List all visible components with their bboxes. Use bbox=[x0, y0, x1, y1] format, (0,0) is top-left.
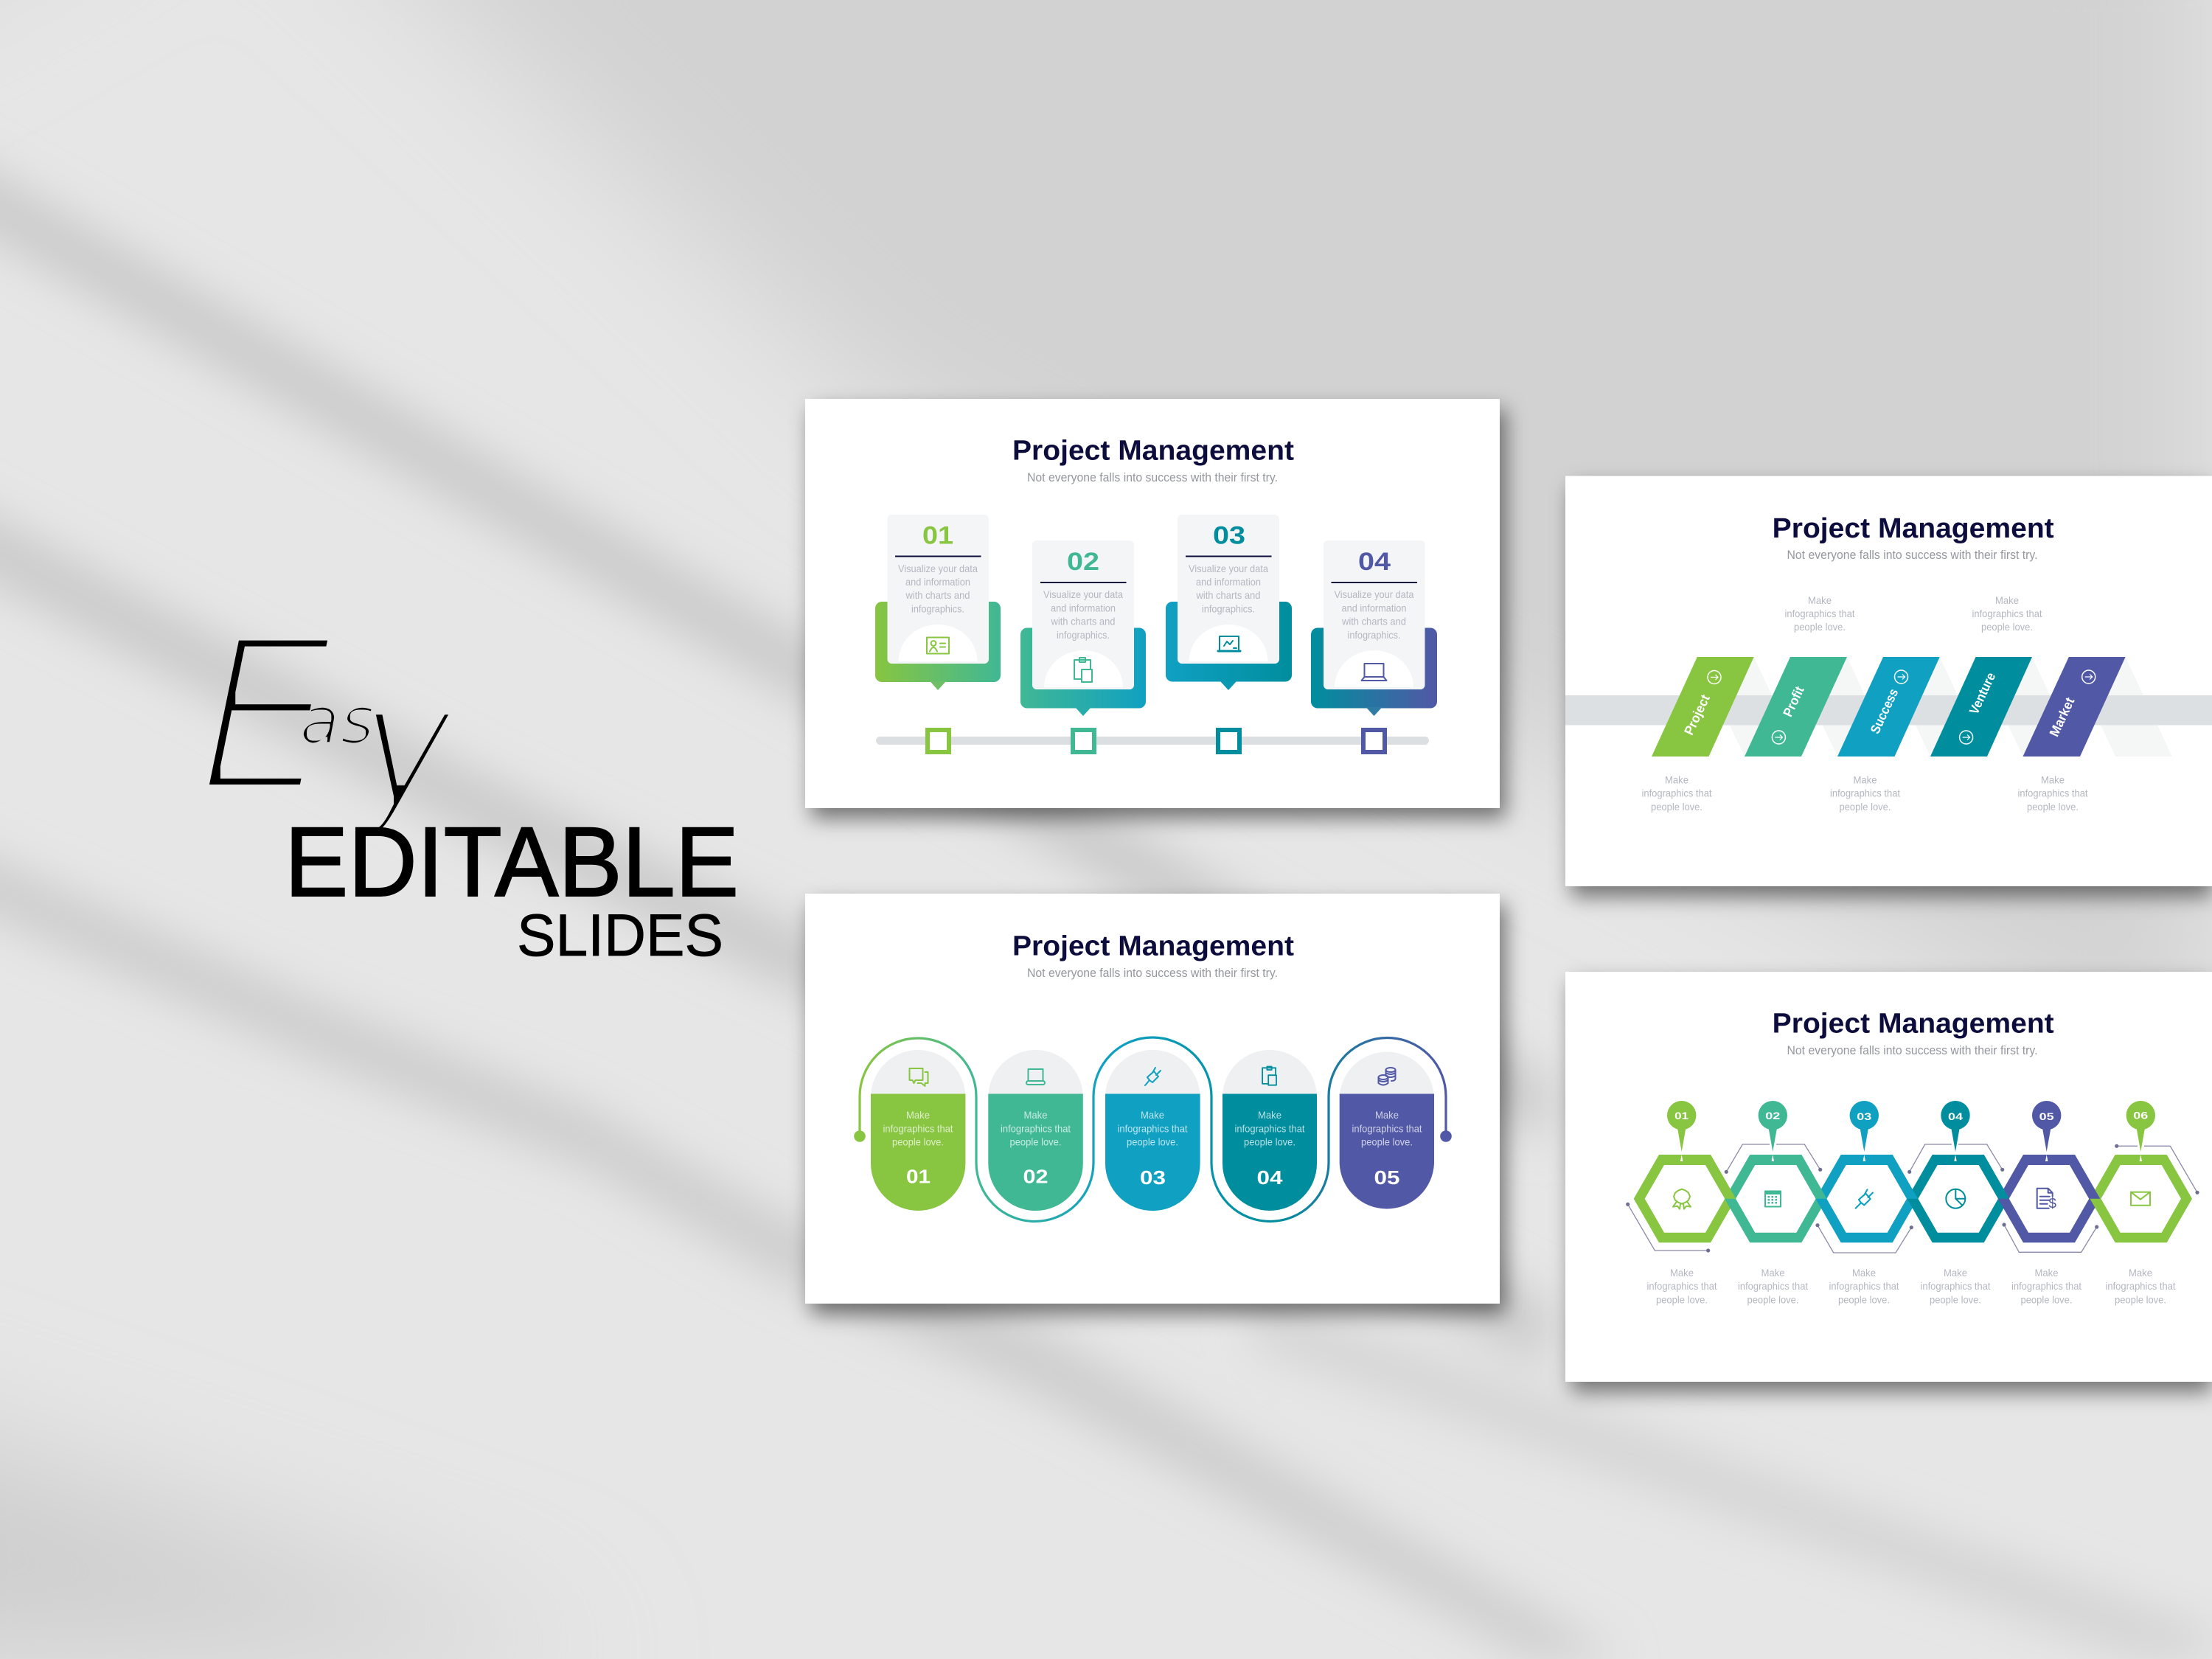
title: Project Management bbox=[1773, 513, 2054, 544]
pin 03: 03 bbox=[1857, 1110, 1872, 1122]
pill 05: Make bbox=[1375, 1109, 1399, 1121]
pill 02: Make bbox=[1023, 1109, 1048, 1121]
card 03 bbox=[1166, 515, 1292, 690]
pill 03: people love. bbox=[1127, 1135, 1178, 1147]
icon: id card bbox=[927, 637, 949, 653]
pill 01: people love. bbox=[892, 1135, 944, 1147]
pin 02 bbox=[1759, 1101, 1787, 1161]
slanted label: Market: Market bbox=[2047, 695, 2077, 739]
icon: calendar bbox=[1764, 1190, 1781, 1208]
pin 06 bbox=[2126, 1101, 2155, 1161]
slanted label: Success: Success bbox=[1868, 686, 1901, 736]
pill 02: infographics that bbox=[1001, 1122, 1071, 1134]
icon: clipboard and tablet bbox=[1262, 1066, 1276, 1085]
mirrored ghost shapes bbox=[1697, 657, 2172, 757]
hexagon captions: infographics that bbox=[1920, 1280, 1991, 1292]
icon: chart board bbox=[1218, 636, 1240, 651]
text block: lower left bbox=[1641, 774, 1712, 813]
card 01: 01 bbox=[922, 522, 953, 550]
hexagon captions: people love. bbox=[1838, 1293, 1890, 1305]
icon: laptop bbox=[1361, 664, 1386, 681]
script word Easy: as bbox=[299, 682, 375, 759]
card 03: Visualize your data bbox=[1189, 563, 1268, 574]
word EDITABLE: EDITABLE bbox=[285, 807, 739, 917]
pill 02: people love. bbox=[1010, 1135, 1062, 1147]
subtitle: Not everyone falls into success with their first try. bbox=[1027, 967, 1278, 980]
pill 04: 04 bbox=[1256, 1166, 1283, 1189]
card 03: and information bbox=[1196, 576, 1261, 588]
slanted label: Venture bbox=[1930, 657, 2032, 757]
slanted label: Market bbox=[2023, 657, 2126, 757]
card 01: Visualize your data bbox=[898, 563, 978, 574]
word SLIDES: SLIDES bbox=[517, 902, 723, 969]
card 01: and information bbox=[905, 576, 970, 588]
hexagon captions: infographics that bbox=[1647, 1280, 1717, 1292]
icon: invoice with dollar sign: $ bbox=[2048, 1197, 2056, 1212]
text block: lower middle: Make bbox=[1854, 774, 1877, 786]
panel: slide with hexagon chain bbox=[1565, 972, 2212, 1382]
card 04 bbox=[1311, 540, 1437, 716]
card 01: infographics. bbox=[911, 603, 964, 615]
pin 04: 04 bbox=[1948, 1110, 1963, 1122]
text block: upper left: people love. bbox=[1794, 621, 1846, 633]
subtitle: Not everyone falls into success with their first try. bbox=[1027, 471, 1278, 484]
timeline markers bbox=[928, 730, 1385, 752]
pill 03: 03 bbox=[1140, 1166, 1166, 1189]
pill 03: Make bbox=[1141, 1109, 1164, 1121]
text block: lower left: Make bbox=[1665, 774, 1688, 786]
hexagon captions: Make bbox=[1852, 1267, 1876, 1279]
slanted label: Venture: Venture bbox=[1966, 670, 1998, 717]
hexagon captions: Make bbox=[1944, 1267, 1967, 1279]
hexagon captions: infographics that bbox=[1829, 1280, 1899, 1292]
card 02: Visualize your data bbox=[1043, 588, 1123, 600]
panel: slide with numbered cards on a timeline bbox=[805, 399, 1500, 808]
slide shadows bbox=[811, 409, 2212, 1392]
card 03: 03 bbox=[1213, 522, 1245, 550]
text block: lower left: people love. bbox=[1651, 801, 1703, 813]
text block: lower right bbox=[2017, 774, 2088, 813]
hexagon captions: people love. bbox=[2115, 1293, 2166, 1305]
pin 05 bbox=[2032, 1101, 2061, 1161]
slanted label: Success bbox=[1837, 657, 1940, 757]
hexagon chain bbox=[1634, 1155, 2192, 1242]
card 04: 04 bbox=[1358, 548, 1391, 576]
slanted label: Project bbox=[1652, 657, 1754, 757]
card 02: infographics. bbox=[1057, 629, 1110, 641]
hexagon captions: Make bbox=[2129, 1267, 2152, 1279]
heading: Easy Editable Slides bbox=[195, 593, 739, 969]
card 02: 02 bbox=[1067, 548, 1099, 576]
pin 01 bbox=[1667, 1101, 1696, 1161]
icon: plug bbox=[1856, 1189, 1873, 1208]
pill 01 bbox=[871, 1050, 965, 1211]
card 04: and information bbox=[1342, 602, 1407, 613]
pill 01: Make bbox=[906, 1109, 930, 1121]
card 02: with charts and bbox=[1051, 615, 1115, 627]
text block: upper right: Make bbox=[1995, 594, 2019, 606]
pill 04 bbox=[1222, 1050, 1317, 1211]
card 02 bbox=[1020, 540, 1146, 716]
icon: coins bbox=[1379, 1068, 1395, 1085]
pin 01: 01 bbox=[1674, 1110, 1688, 1121]
icon: pie chart bbox=[1946, 1189, 1965, 1208]
slanted label: Profit: Profit bbox=[1780, 684, 1807, 719]
text block: upper right: people love. bbox=[1981, 621, 2033, 633]
text block: lower middle: infographics that bbox=[1830, 787, 1900, 799]
text block: upper right: infographics that bbox=[1972, 608, 2042, 619]
text block: lower right: infographics that bbox=[2017, 787, 2088, 799]
text block: lower middle: people love. bbox=[1839, 801, 1891, 813]
title: Project Management bbox=[1012, 931, 1294, 961]
icon: invoice with dollar sign bbox=[2037, 1189, 2056, 1212]
pin 05: 05 bbox=[2039, 1110, 2054, 1122]
card 04: with charts and bbox=[1341, 615, 1406, 627]
card 02: and information bbox=[1051, 602, 1116, 613]
hexagon captions: infographics that bbox=[1738, 1280, 1808, 1292]
icon: award bbox=[1673, 1189, 1691, 1209]
pill 04: infographics that bbox=[1234, 1122, 1305, 1134]
pin 06: 06 bbox=[2133, 1109, 2149, 1121]
text block: lower left: infographics that bbox=[1641, 787, 1712, 799]
panel: slide with slanted labels bbox=[1565, 476, 2212, 886]
pill 05: 05 bbox=[1374, 1166, 1399, 1189]
card 01 bbox=[875, 515, 1001, 690]
hexagon captions: people love. bbox=[1930, 1293, 1981, 1305]
pill 03 bbox=[1105, 1050, 1200, 1211]
text block: lower middle bbox=[1830, 774, 1900, 813]
hexagon captions: Make bbox=[1761, 1267, 1785, 1279]
text block: upper right bbox=[1972, 594, 2042, 633]
hexagon captions bbox=[1647, 1267, 2176, 1305]
card 01: with charts and bbox=[905, 589, 970, 601]
text block: upper left: Make bbox=[1808, 594, 1832, 606]
card 03: with charts and bbox=[1196, 589, 1261, 601]
timeline track bbox=[876, 737, 1429, 745]
hexagon captions: infographics that bbox=[2011, 1280, 2081, 1292]
text block: lower right: people love. bbox=[2027, 801, 2079, 813]
panel: slide with connected pills bbox=[805, 894, 1500, 1304]
pill 04: people love. bbox=[1244, 1135, 1295, 1147]
pill 04: Make bbox=[1258, 1109, 1281, 1121]
pill 05: infographics that bbox=[1352, 1122, 1422, 1134]
hexagon captions: people love. bbox=[1656, 1293, 1708, 1305]
pill 01: infographics that bbox=[883, 1122, 953, 1134]
icon: plug bbox=[1145, 1068, 1161, 1085]
pin 04 bbox=[1941, 1101, 1970, 1161]
script word Easy: E bbox=[195, 593, 338, 841]
pill 01: 01 bbox=[906, 1165, 931, 1187]
pill 05: people love. bbox=[1361, 1135, 1413, 1147]
subtitle: Not everyone falls into success with their first try. bbox=[1787, 549, 2038, 562]
hexagon captions: people love. bbox=[2020, 1293, 2072, 1305]
card 04: Visualize your data bbox=[1335, 588, 1414, 600]
card 04: infographics. bbox=[1348, 629, 1401, 641]
icon: laptop bbox=[1026, 1069, 1045, 1085]
pin 02: 02 bbox=[1765, 1110, 1781, 1121]
hexagon captions: Make bbox=[2035, 1267, 2059, 1279]
pill 02 bbox=[988, 1050, 1083, 1211]
script word Easy bbox=[195, 593, 456, 844]
pill 05 bbox=[1340, 1052, 1434, 1208]
hexagon captions: people love. bbox=[1747, 1293, 1799, 1305]
hexagon captions: infographics that bbox=[2106, 1280, 2176, 1292]
slanted label: Project: Project bbox=[1681, 692, 1713, 737]
title: Project Management bbox=[1012, 435, 1294, 466]
text block: upper left bbox=[1784, 594, 1855, 633]
pill 02: 02 bbox=[1023, 1165, 1048, 1187]
thin connector lines bbox=[1626, 1144, 2199, 1253]
icon: envelope bbox=[2131, 1192, 2150, 1206]
pin 03 bbox=[1850, 1101, 1879, 1161]
horizontal grey band bbox=[1565, 695, 2212, 726]
subtitle: Not everyone falls into success with their first try. bbox=[1787, 1044, 2038, 1057]
script word Easy: y bbox=[355, 647, 456, 844]
snake connector line bbox=[854, 1037, 1452, 1221]
pill 03: infographics that bbox=[1118, 1122, 1188, 1134]
text block: lower right: Make bbox=[2041, 774, 2065, 786]
icon: chat bubbles bbox=[910, 1068, 928, 1086]
hexagon captions: Make bbox=[1670, 1267, 1694, 1279]
title: Project Management bbox=[1773, 1009, 2054, 1040]
text block: upper left: infographics that bbox=[1784, 608, 1855, 619]
card 03: infographics. bbox=[1202, 603, 1255, 615]
icon: clipboard and tablet bbox=[1074, 658, 1092, 682]
slanted label: Profit bbox=[1745, 657, 1847, 757]
